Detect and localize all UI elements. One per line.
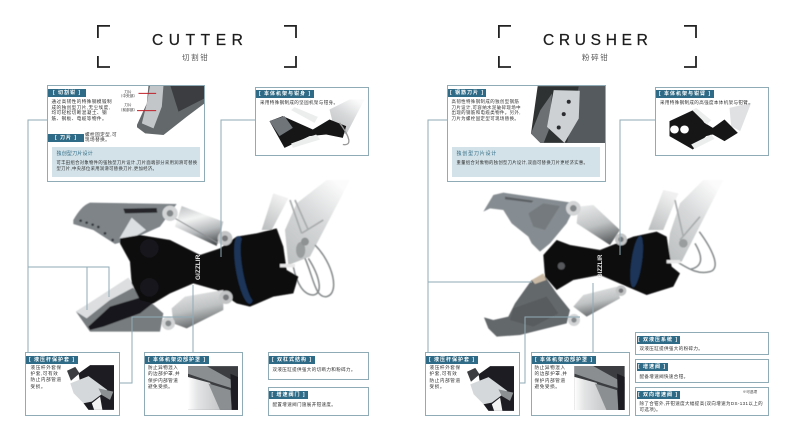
tag: two-way speed valve: [ 双向增速阀 ]: [638, 392, 678, 398]
label: blade callouts: 刀片: [124, 103, 132, 107]
panel: crusher cylinder guard: [425, 352, 520, 416]
tag: hydraulic system: [ 双液压系统 ]: [638, 336, 678, 342]
callout: original blade design: 独创型刀片设计: [56, 151, 93, 157]
panel: cutter blade: [47, 85, 205, 182]
tag: cylinder guard: [26, 356, 78, 364]
text: two-way speed valve description: 除了合钳外,开钳速度大幅提高(双向增速为DS-131以上的可选项)。: [640, 400, 763, 412]
text: side guard description: 防止异物混入的边部护罩,并保护内部管道避免受损。: [534, 365, 568, 389]
tag: hydraulic system: [636, 336, 680, 344]
tag: frame and arm: [656, 90, 714, 98]
tag: frame and body: [ 本体机架与钳身 ]: [259, 91, 311, 97]
panel: crusher dual hydraulic system: [635, 332, 769, 355]
label: blade callouts: （中央部）: [119, 94, 137, 98]
tag: lever structure: [ 双杠式结构 ]: [272, 356, 312, 362]
tag: side guard: [145, 356, 209, 364]
tag: lever structure: [269, 356, 315, 364]
crusher title block: 粉碎钳: [582, 53, 609, 62]
tag: blade: [48, 134, 84, 142]
callout: original blade design: [452, 146, 600, 176]
tag: frame and body: [256, 90, 314, 98]
tag: blade: [ 刀片 ]: [55, 135, 77, 141]
photo: cutter frame: [270, 100, 361, 148]
text: frame description: 采用特殊钢制成的坚固机架与钳身。: [260, 100, 338, 105]
callout: original blade design: 可丰田组合对象物件的强独型刀片设计,刀片面端部分采用润滑可替换型刀片,中央部位采用润滑可替换刀片,更加经济。: [56, 160, 197, 170]
photo: crusher frame: [670, 103, 751, 150]
text: lever structure description: 双液压缸提供强大的切断力和粉碎力。: [272, 366, 356, 372]
text: speed valve description: 配备增速阀快速合钳。: [640, 374, 688, 378]
tag: cutter blade: [ 切割钳 ]: [53, 90, 81, 96]
cutter machine: [73, 180, 350, 332]
tag: cylinder guard: [ 液压杆保护套 ]: [429, 356, 475, 362]
callout: original blade design: [52, 146, 200, 176]
text: cutter blade description: 通过高韧性的特殊钢模锻制成的独创型刀片,无尘埃度,均可轻松切断混凝土、钢筋、钢板、电缆等物件。: [52, 99, 112, 120]
tag: speed valve: [ 增速阀门 ]: [271, 392, 306, 398]
tag: cutter blade: [48, 88, 86, 96]
panel: crusher speed valve: [635, 359, 769, 383]
tag: speed valve: [269, 390, 308, 398]
crusher logo text: GIZZLIR: [598, 254, 604, 278]
crusher title block: CRUSHER: [543, 32, 653, 49]
tag: side guard: [ 本体机架边部护罩 ]: [148, 356, 206, 362]
panel: cutter frame and body: [255, 87, 369, 156]
note: optional item: ※可选项: [742, 390, 757, 394]
text: frame description: 采用特殊钢制成的高强度本体机架与钳臂。: [660, 100, 753, 105]
panel: cutter lever structure: [268, 352, 369, 380]
tag: rebar blade: [448, 88, 486, 96]
panel: crusher two-way speed valve: [635, 387, 769, 416]
label: blade callouts: 刀片: [124, 90, 132, 94]
label: blade callouts: （前部部）: [119, 108, 137, 112]
text: cylinder guard description: 液压杆外套保护套,可有效防止内部管道受损。: [430, 365, 461, 389]
tag: side guard: [532, 356, 596, 364]
panel: cutter cylinder guard: [25, 352, 120, 416]
panel: cutter speed valve: [268, 387, 369, 416]
photo: rebar blade close-up: [531, 86, 605, 143]
tag: cylinder guard: [426, 356, 478, 364]
label: blade callouts: [119, 90, 137, 112]
crusher leader lines: [428, 120, 655, 383]
text: hydraulic system description: 双液压缸提供强大的粉碎力。: [640, 346, 703, 350]
photo: cutter blade close-up: [137, 86, 204, 135]
cutter title block: 切割钳: [182, 53, 209, 62]
cutter leader lines: [28, 120, 255, 383]
callout: original blade design: 独创型刀片设计: [456, 151, 497, 157]
text: speed valve description: 配置增速阀门施展开钳速度。: [272, 402, 336, 406]
photo: side guard: [574, 366, 625, 410]
tag: rebar blade: [ 钢筋刀片 ]: [450, 90, 484, 96]
panel: cutter frame side guard: [144, 352, 243, 416]
text: blade description: 螺栓固定型,可现场替换。: [85, 132, 117, 142]
panel: crusher frame and arm: [655, 87, 769, 156]
text: cylinder guard description: 液压杆外套保护套,可有效防止内部管道受损。: [30, 364, 62, 389]
tag: cylinder guard: [ 液压杆保护套 ]: [29, 356, 75, 362]
callout: original blade design: 重量组合对象物的独创型刀片设计,双面可替换刀片更经济实惠。: [456, 160, 588, 164]
panel: crusher frame side guard: [531, 352, 630, 416]
photo: cylinder guard: [67, 365, 114, 410]
cutter title block: CUTTER: [152, 32, 248, 49]
text: side guard description: 防止异物混入的边部护罩,并保护内部管道避免受损。: [148, 365, 180, 389]
tag: speed valve: [ 增速阀 ]: [638, 364, 666, 370]
tag: two-way speed valve: [636, 390, 680, 398]
tag: speed valve: [636, 363, 668, 371]
crusher machine: [483, 180, 723, 337]
photo: cylinder guard: [467, 366, 514, 411]
photo: side guard: [188, 366, 238, 410]
text: rebar blade description: 高韧性特殊钢制成的独创型钢筋刀片设计,可容纳水泥破碎现场中出现的钢筋和电缆类物件。另外,刀片为螺栓固定型可现场替换。: [452, 99, 521, 120]
tag: frame and arm: [ 本体机架与钳臂 ]: [659, 91, 711, 97]
cutter title block: [97, 25, 297, 68]
tag: side guard: [ 本体机架边部护罩 ]: [535, 356, 593, 362]
crusher title block: [498, 25, 697, 68]
cutter logo text: GIZZLIR: [195, 254, 202, 280]
panel: crusher rebar blade: [447, 85, 606, 182]
